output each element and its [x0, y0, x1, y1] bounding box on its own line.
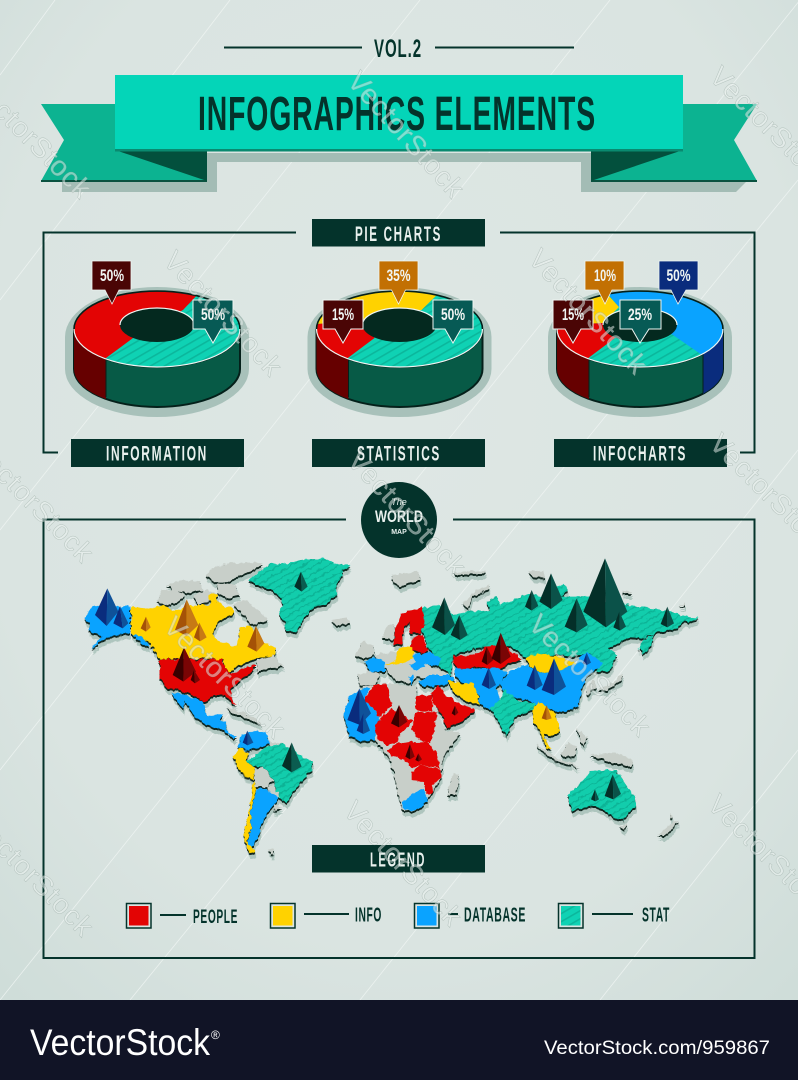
australia [567, 770, 635, 820]
badge: the world map [361, 482, 437, 558]
footer bar: ® [211, 1028, 220, 1042]
label: statistics [312, 439, 485, 467]
watermarks: VectorStock [158, 610, 292, 745]
label: information [71, 439, 244, 467]
label: infocharts [554, 439, 727, 467]
legend: stat: STAT [642, 904, 670, 926]
label: information: INFORMATION [106, 442, 208, 466]
legend: database [414, 904, 526, 928]
callout: 50 percent teal: 50% [201, 305, 225, 324]
east africa [412, 765, 442, 795]
west africa [343, 688, 380, 742]
callout: 50 percent red: 50% [100, 266, 124, 285]
brazil [247, 743, 313, 803]
callout: 15 percent [323, 300, 363, 343]
south africa [402, 788, 428, 811]
world map: americas [85, 558, 350, 855]
kazakhstan [453, 645, 522, 675]
guyana [268, 740, 283, 747]
eastern europe [412, 653, 441, 667]
morocco and algeria [365, 684, 392, 717]
watermarks: VectorStock [338, 795, 469, 932]
sweden and finland [410, 607, 425, 634]
alaska panhandle [132, 634, 150, 647]
mexico and central america [172, 693, 237, 739]
arabia [432, 685, 476, 728]
legend: stat [558, 904, 670, 928]
central africa [388, 742, 440, 768]
germany [385, 647, 413, 665]
callout: 15 percent red: 15% [562, 305, 584, 324]
callout: 50 percent teal [193, 300, 233, 343]
map pyramids: americas [95, 572, 308, 772]
watermarks: VectorStock [342, 445, 473, 582]
watermarks: VectorStock [342, 65, 471, 204]
header: volume label: VOL.2 [374, 35, 422, 63]
callout: 50 percent [433, 300, 473, 343]
callout: 15 percent: 15% [332, 305, 354, 324]
falklands [267, 848, 274, 855]
africa base [363, 683, 460, 812]
callout: 50 percent red [92, 261, 131, 304]
madagascar [447, 773, 459, 795]
heading: legend [312, 845, 485, 872]
watermarks: VectorStock [158, 245, 289, 382]
watermarks: VectorStock [523, 243, 654, 380]
callout: 35 percent [379, 261, 418, 304]
legend: people [126, 904, 238, 928]
iceland-side islet [332, 617, 349, 626]
watermarks: VectorStock [523, 608, 657, 743]
badge: the world map: The [391, 497, 407, 507]
callout: 25 percent teal: 25% [628, 305, 652, 324]
iran [448, 680, 480, 705]
world map: eurasia, africa, oceania [343, 570, 698, 835]
callout: 35 percent: 35% [386, 266, 410, 285]
italy [408, 675, 413, 685]
turkey [418, 675, 455, 687]
sudan [412, 712, 437, 743]
footer url: VectorStock.com/959867 [544, 1038, 770, 1059]
argentina [247, 788, 278, 847]
legend: database: DATABASE [464, 904, 526, 926]
europe base [357, 650, 450, 686]
footer logo: VectorStock [30, 1022, 210, 1063]
legend: info [270, 904, 382, 928]
panel: pie charts frame [44, 232, 754, 452]
footer bar [0, 1000, 798, 1080]
peru [233, 747, 255, 781]
heading: pie charts [312, 219, 485, 246]
newfoundland area [257, 655, 283, 673]
chile [243, 782, 256, 853]
heading: legend: LEGEND [370, 850, 426, 872]
british isles and north europe [355, 625, 395, 658]
caribbean [227, 707, 263, 725]
heading: pie charts: PIE CHARTS [355, 223, 442, 246]
callout: 15 percent red [553, 300, 593, 343]
mongolia [525, 653, 577, 673]
label: statistics: STATISTICS [357, 442, 441, 466]
title ribbon [41, 75, 757, 192]
donut chart: infocharts [548, 260, 732, 417]
alaska [85, 605, 130, 649]
panel: world map frame [44, 520, 754, 958]
canadian arctic islands [157, 563, 267, 625]
callout: 50 percent blue [659, 261, 698, 304]
usa [160, 659, 256, 705]
central asia [455, 668, 507, 710]
north atlantic and arctic islands [392, 570, 685, 608]
donut chart: statistics [308, 260, 492, 417]
uruguay [273, 803, 282, 812]
badge: the world map: MAP [391, 529, 407, 536]
colombia and venezuela [238, 731, 270, 750]
legend: people: PEOPLE [193, 907, 238, 928]
callout: 10 percent: 10% [594, 266, 616, 285]
legend: info: INFO [355, 904, 382, 926]
greenland [248, 558, 350, 632]
baltics and poland [410, 635, 428, 653]
callout: 10 percent [585, 261, 624, 304]
india [490, 688, 537, 737]
donut chart: information [65, 260, 249, 417]
canada [131, 593, 276, 672]
badge: the world map: WORLD [375, 507, 423, 526]
kamchatka [639, 635, 653, 655]
russia [422, 583, 698, 675]
map pyramids: eurasia, africa, oceania [347, 558, 674, 801]
label: infocharts: INFOCHARTS [593, 442, 687, 466]
callout: 50 percent blue: 50% [666, 266, 690, 285]
thailand [532, 702, 560, 748]
france [365, 657, 385, 672]
china [500, 652, 603, 713]
balkans [409, 661, 425, 671]
east asia islands and southeast asia [537, 673, 633, 767]
bolivia [254, 767, 273, 787]
paraguay [267, 785, 280, 797]
callout: 25 percent teal [620, 300, 661, 343]
mali and niger [375, 708, 413, 745]
new zealand and tasmania [620, 813, 678, 835]
egypt [416, 695, 433, 712]
norway [393, 610, 413, 645]
callout: 50 percent: 50% [441, 305, 465, 324]
